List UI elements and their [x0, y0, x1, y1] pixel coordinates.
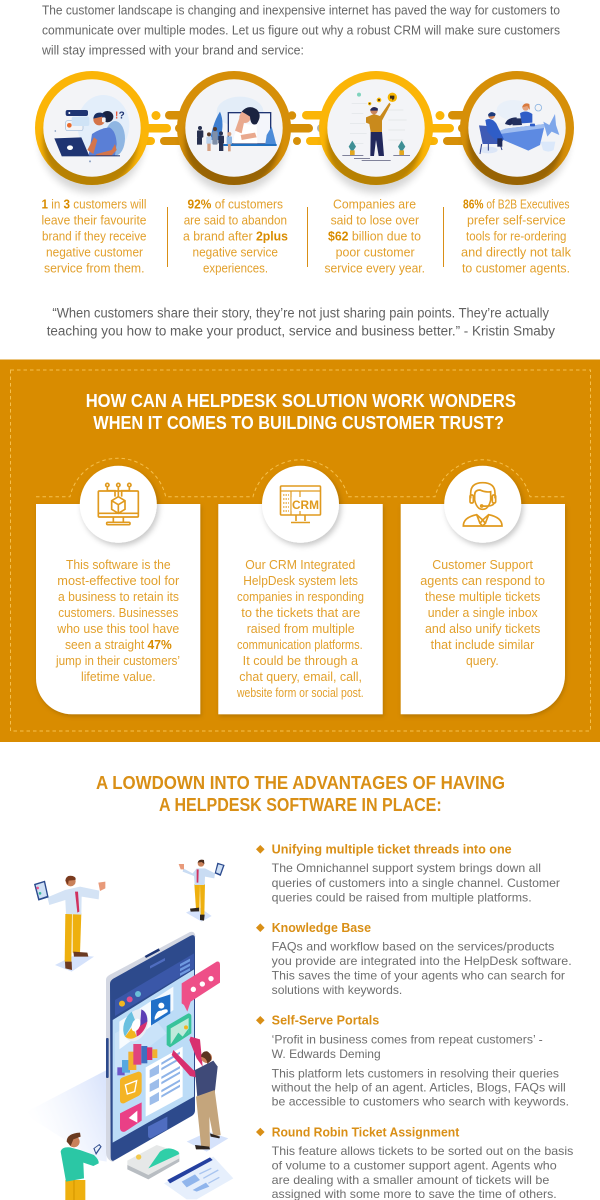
- advantages heading: A HELPDESK SOFTWARE IN PLACE:: [159, 795, 442, 815]
- stat 1 text: leave their favourite: [42, 214, 147, 228]
- bars: [117, 1044, 157, 1075]
- card 1 text: who use this tool have: [56, 622, 179, 636]
- stat 4 text: tools for re-ordering: [466, 230, 566, 244]
- stat 3 text: $62 billion due to: [328, 230, 421, 244]
- person with tablet, left: [34, 876, 105, 972]
- icon: headset agent: [444, 466, 521, 543]
- icon: diamond bullet: [256, 1128, 265, 1136]
- intro paragraph: communicate over multiple modes. Let us figure out why a robust CRM will make sure customers: [42, 24, 560, 38]
- list: advantage 3: [256, 1014, 569, 1109]
- list: advantage 1: [256, 843, 560, 904]
- item body: [272, 1144, 573, 1200]
- icon: CRM monitor: CRM: [292, 500, 319, 512]
- stat 3 text: poor customer: [336, 246, 415, 260]
- stat 3 text: service every year.: [324, 262, 425, 276]
- card 3 text: that include similar: [431, 638, 534, 652]
- card 3 text: Customer Support: [432, 558, 534, 572]
- stat 1 text: 1 in 3 customers will: [42, 198, 146, 212]
- circle 1: support agent at laptop: ?: [119, 111, 125, 122]
- stack of pictures: [127, 1145, 179, 1179]
- intro paragraph: The customer landscape is changing and inexpensive internet has paved the way for customers to: [42, 4, 560, 18]
- stat 3 text: [324, 198, 425, 276]
- quote: “When customers share their story, they’re not just sharing pain points. They’re actually: [52, 306, 549, 320]
- item body: be accessible to customers who search with keywords.: [272, 1095, 569, 1109]
- quote: [47, 306, 555, 338]
- stat 3 text: said to lose over: [331, 214, 419, 228]
- card 3 text: these multiple tickets: [425, 590, 540, 604]
- stat 4 text: prefer self-service: [467, 214, 566, 228]
- item body: queries could be raised from multiple platforms.: [272, 890, 532, 904]
- illustration: mobile app with people: [23, 860, 233, 1200]
- icon: monitor with cube: [80, 466, 157, 543]
- card 2 text: communication platforms.: [237, 638, 363, 652]
- advantages heading: [96, 773, 505, 815]
- stat 2 text: are said to abandon: [184, 214, 287, 228]
- icon: diamond bullet: [256, 845, 265, 854]
- band heading: WHEN IT COMES TO BUILDING CUSTOMER TRUST?: [93, 413, 504, 433]
- card 3 text: agents can respond to: [420, 574, 545, 588]
- item body: solutions with keywords.: [272, 983, 402, 997]
- card 2: [218, 466, 383, 714]
- card 1 text: most-effective tool for: [57, 574, 179, 588]
- icon: CRM monitor: [262, 466, 339, 543]
- item title: Unifying multiple ticket threads into one: [272, 843, 512, 857]
- band heading: [86, 391, 516, 433]
- card 2 text: [236, 558, 364, 700]
- card 2 text: It could be through a: [243, 654, 358, 668]
- card 3: [401, 466, 565, 714]
- stat 4 text: 86% of B2B Executives: [463, 198, 570, 212]
- stat 2 text: experiences.: [203, 262, 268, 276]
- card 3 text: [420, 558, 545, 668]
- stat 1 text: [42, 198, 147, 276]
- card 2 text: companies in responding: [237, 590, 364, 604]
- pie chart: [119, 1006, 153, 1045]
- card 1 text: lifetime value.: [81, 670, 156, 684]
- card 2 text: raised from multiple: [247, 622, 355, 636]
- icon: diamond bullet: [256, 1016, 265, 1025]
- card 1 text: customers. Businesses: [58, 606, 178, 620]
- item body: W. Edwards Deming: [272, 1047, 381, 1061]
- stat 1 text: negative customer: [46, 246, 143, 260]
- list: advantage 4: [256, 1125, 573, 1200]
- circle 3: man pointing at feedback icons: [319, 71, 433, 193]
- card 1 text: jump in their customers’: [55, 654, 180, 668]
- item title: Knowledge Base: [272, 921, 371, 935]
- chat bubble: [182, 961, 220, 1012]
- item title: Round Robin Ticket Assignment: [272, 1125, 460, 1139]
- band heading: HOW CAN A HELPDESK SOLUTION WORK WONDERS: [86, 391, 516, 411]
- item title: Self-Serve Portals: [272, 1014, 379, 1028]
- stat 2 text: [183, 198, 288, 276]
- item body: of volume to a customer support agent. Agents who: [272, 1158, 557, 1172]
- card 1: [36, 466, 200, 714]
- list: advantage 2: [256, 921, 572, 997]
- item body: This saves the time of your agents who can search for: [272, 968, 565, 982]
- item body: This feature allows tickets to be sorted out on the basis: [272, 1144, 573, 1158]
- card 3 text: and also unify tickets: [425, 622, 540, 636]
- circle 4: self-service desk meeting: [460, 71, 574, 193]
- card 2 text: Our CRM Integrated: [245, 558, 355, 572]
- stat 3 text: Companies are: [333, 198, 416, 212]
- stat 4 text: and directly not talk: [461, 246, 572, 260]
- icon: diamond bullet: [256, 923, 265, 932]
- connectors between circles: [140, 111, 478, 145]
- card 2 text: to the tickets that are: [241, 606, 360, 620]
- stat 4 text: to customer agents.: [462, 262, 570, 276]
- item body: [271, 1032, 569, 1109]
- advantages heading: A LOWDOWN INTO THE ADVANTAGES OF HAVING: [96, 773, 505, 793]
- phone: [106, 932, 195, 1162]
- stat 1 text: brand if they receive: [42, 230, 147, 244]
- panel: helpdesk trust band: [0, 360, 600, 742]
- stat 2 text: 92% of customers: [188, 198, 283, 212]
- circle 2: woman on video screen with audience: [177, 71, 291, 193]
- item body: This platform lets customers in resolving their queries: [272, 1066, 559, 1080]
- card 2 text: HelpDesk system lets: [243, 574, 358, 588]
- card 1 text: seen a straight 47%: [65, 638, 172, 652]
- floating web page: [164, 1157, 233, 1199]
- item body: without the help of an agent. Articles, Blogs, FAQs will: [271, 1080, 566, 1094]
- stat 4 text: [461, 198, 572, 276]
- card 1 text: a business to retain its: [58, 590, 179, 604]
- item body: The Omnichannel support system brings down all: [272, 861, 541, 875]
- stat 1 text: service from them.: [44, 262, 144, 276]
- intro paragraph: [41, 4, 560, 58]
- person in teal with phone: [61, 1133, 102, 1200]
- item body: ‘Profit in business comes from repeat customers’ -: [272, 1032, 543, 1046]
- item body: FAQs and workflow based on the services/products: [272, 940, 554, 954]
- person reaching: [172, 1037, 228, 1152]
- card 2 text: website form or social post.: [236, 686, 364, 700]
- card 1 text: This software is the: [66, 558, 171, 572]
- quote: teaching you how to make your product, service and business better.” - Kristin Smaby: [47, 324, 555, 338]
- card 2 text: chat query, email, call,: [239, 670, 362, 684]
- stat 2 text: a brand after 2plus: [183, 230, 288, 244]
- picture card: [167, 1013, 191, 1047]
- item body: are dealing with a smaller amount of tickets will be: [272, 1173, 550, 1187]
- stat 2 text: negative service: [192, 246, 278, 260]
- item body: you provide are integrated into the HelpDesk software.: [272, 954, 572, 968]
- card 1 text: [55, 558, 180, 684]
- card 3 text: query.: [466, 654, 499, 668]
- item body: [272, 940, 572, 997]
- item body: queries of customers into a single channel. Customer: [272, 876, 560, 890]
- item body: [272, 861, 560, 904]
- intro paragraph: will stay impressed with your brand and service:: [41, 44, 304, 58]
- person with tablet, top right: [179, 860, 225, 922]
- circle 1: support agent at laptop: [35, 71, 149, 193]
- circle 1: support agent at laptop: !: [115, 111, 118, 122]
- card 3 text: under a single inbox: [428, 606, 538, 620]
